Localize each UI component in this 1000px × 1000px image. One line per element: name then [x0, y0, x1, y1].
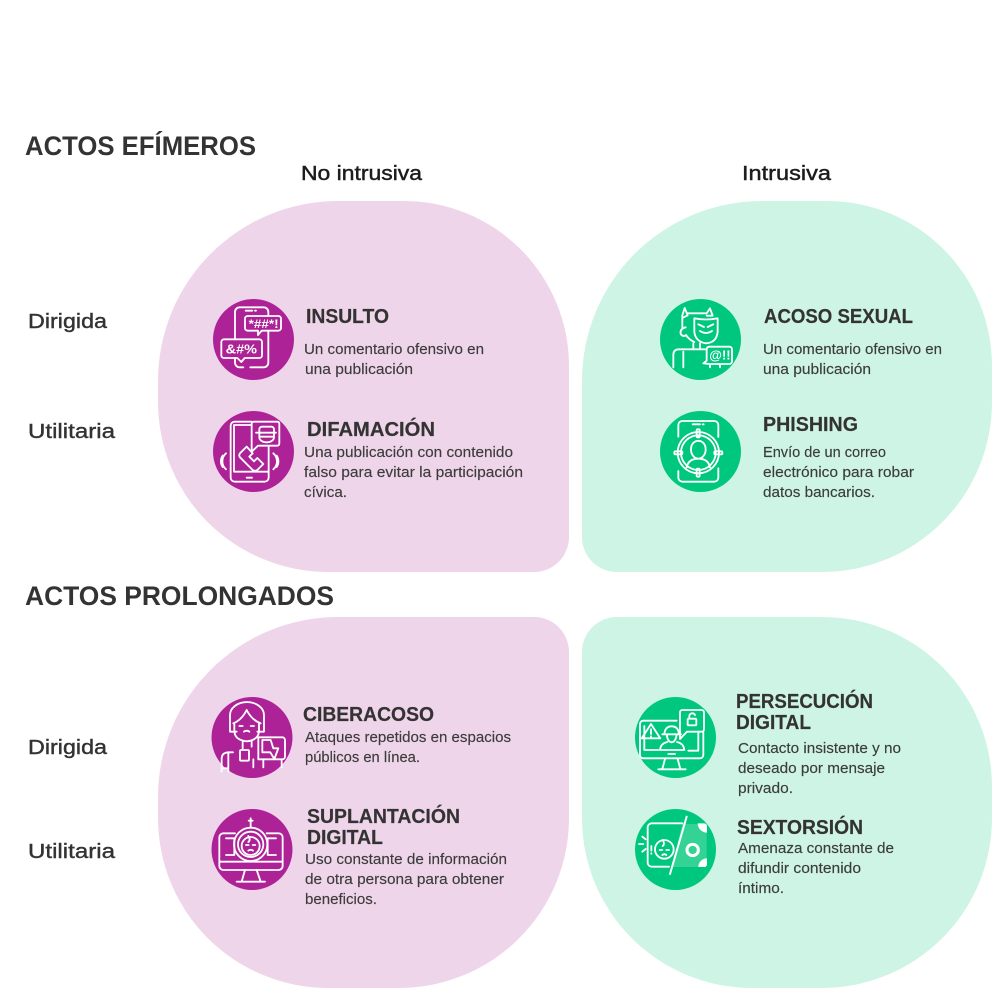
text: suplantación description: Uso constante de información	[305, 851, 507, 868]
text: sextorsión description	[738, 840, 894, 897]
text: acoso sexual description: Un comentario ofensivo en	[763, 341, 942, 358]
text: sextorsión description: Amenaza constante de	[738, 840, 894, 857]
text: phishing description: electrónico para robar	[763, 464, 914, 481]
heading: actos prolongados: ACTOS PROLONGADOS	[25, 581, 334, 611]
title: phishing: PHISHING	[763, 414, 858, 436]
title: suplantación digital: DIGITAL	[307, 827, 383, 849]
icon: masked devil	[660, 299, 741, 380]
column heading: no intrusiva: No intrusiva	[301, 162, 423, 185]
text: phishing description: Envío de un correo	[763, 444, 886, 461]
panel: prolongados no intrusiva	[158, 617, 569, 988]
title: suplantación digital	[307, 804, 460, 849]
row label: dirigida (prolongados): Dirigida	[28, 736, 108, 759]
title: insulto: INSULTO	[306, 306, 389, 328]
title: persecución digital: DIGITAL	[736, 712, 811, 734]
text: insulto description	[304, 341, 484, 378]
text: suplantación description: beneficios.	[305, 891, 377, 908]
text: ciberacoso description	[305, 729, 511, 766]
text: persecución description	[738, 740, 901, 797]
text: ciberacoso description: Ataques repetidos en espacios	[305, 729, 511, 746]
text: difamación description: Una publicación con contenido	[304, 444, 513, 461]
text: acoso sexual description: una publicación	[763, 361, 871, 378]
title: suplantación digital: SUPLANTACIÓN	[307, 804, 460, 828]
panel: efímeros intrusiva	[582, 201, 992, 572]
icon: phone with insults	[213, 299, 294, 380]
text: suplantación description	[305, 851, 507, 908]
icon: banknote and face slashed	[635, 809, 716, 890]
icon: phone with insults: *##*!	[249, 317, 279, 331]
title: sextorsión: SEXTORSIÓN	[737, 815, 863, 839]
text: acoso sexual description	[763, 341, 942, 378]
text: difamación description	[304, 444, 523, 501]
title: ciberacoso: CIBERACOSO	[303, 704, 434, 726]
text: phishing description: datos bancarios.	[763, 484, 875, 501]
text: suplantación description: de otra persona para obtener	[305, 871, 504, 888]
text: difamación description: cívica.	[304, 484, 347, 501]
title: acoso sexual: ACOSO SEXUAL	[764, 306, 913, 328]
row label: utilitaria (prolongados): Utilitaria	[28, 840, 116, 863]
text: sextorsión description: difundir contenido	[738, 860, 861, 877]
title: difamación: DIFAMACIÓN	[307, 417, 435, 441]
icon: phone with insults: &#%	[226, 342, 257, 357]
icon: masked devil: @!!	[709, 349, 731, 363]
panel: prolongados intrusiva	[582, 617, 992, 988]
column heading: intrusiva: Intrusiva	[742, 162, 832, 185]
text: persecución description: deseado por mensaje	[738, 760, 885, 777]
title: persecución digital	[736, 689, 873, 734]
row label: dirigida (efímeros): Dirigida	[28, 310, 108, 333]
text: difamación description: falso para evitar la participación	[304, 464, 523, 481]
text: persecución description: privado.	[738, 780, 793, 797]
title: persecución digital: PERSECUCIÓN	[736, 689, 873, 713]
icon: monitor with stalker and lock	[635, 697, 716, 778]
icon: woman with thumbs down	[212, 697, 292, 778]
text: phishing description	[763, 444, 914, 501]
icon: phone with call and impostor	[213, 411, 294, 492]
row label: utilitaria (efímeros): Utilitaria	[28, 420, 116, 443]
panel: efímeros no intrusiva	[158, 201, 569, 572]
text: insulto description: Un comentario ofensivo en	[304, 341, 484, 358]
text: ciberacoso description: públicos en línea.	[305, 749, 420, 766]
icon: monitor with mirror and face	[212, 809, 292, 890]
text: persecución description: Contacto insistente y no	[738, 740, 901, 757]
icon: phone with target on person	[660, 411, 741, 492]
heading: actos efímeros: ACTOS EFÍMEROS	[25, 131, 256, 161]
text: insulto description: una publicación	[305, 361, 413, 378]
text: sextorsión description: íntimo.	[738, 880, 784, 897]
